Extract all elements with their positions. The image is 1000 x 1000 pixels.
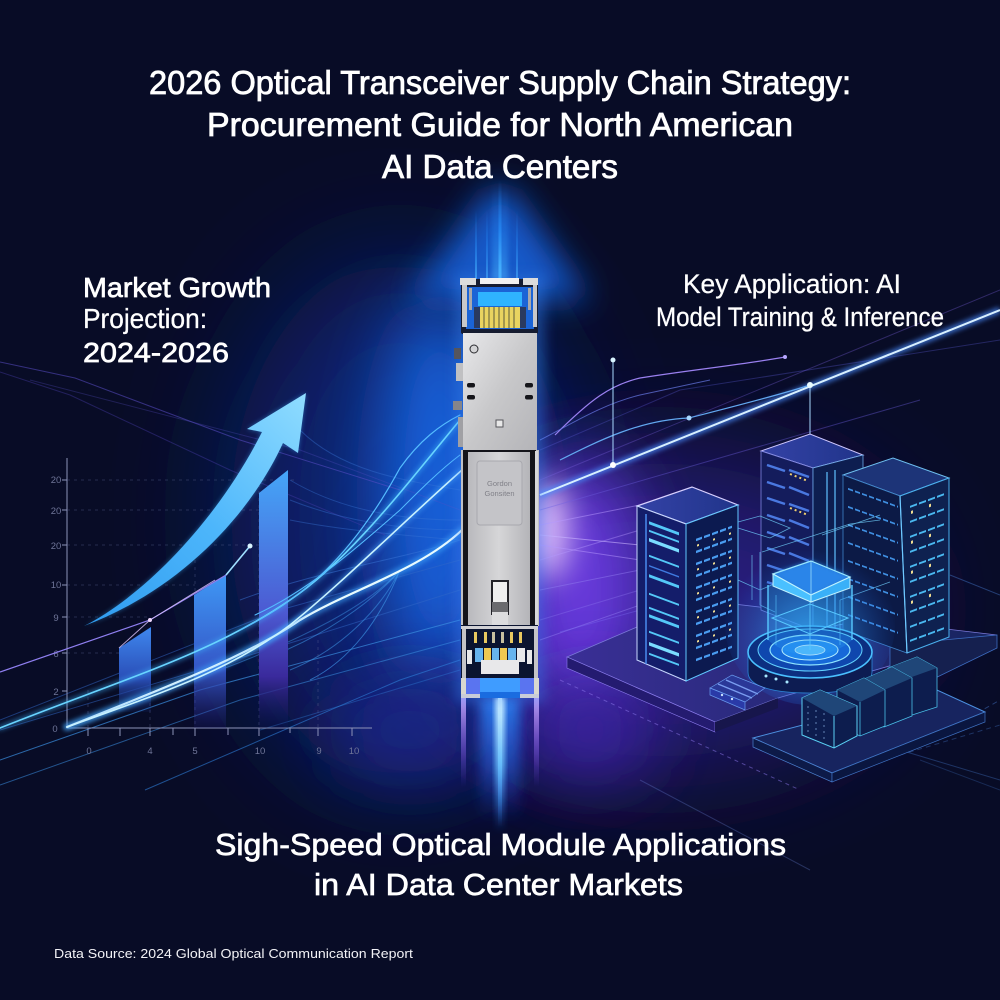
small server: second [837, 678, 885, 736]
chart axis labels: 20 [51, 506, 61, 517]
heading: market growth projection [83, 272, 271, 368]
chart axis labels: 10 [51, 580, 61, 591]
isometric data center [567, 434, 997, 782]
subheading: applications: in AI Data Center Markets [314, 867, 683, 902]
gold contacts [474, 307, 526, 328]
bottom connector [461, 625, 539, 698]
growth arrow [84, 393, 306, 626]
label plate [477, 461, 522, 525]
left side clips [453, 348, 463, 447]
top cage [460, 278, 538, 334]
chart axis labels: 10 [255, 746, 265, 757]
connection wires [738, 515, 890, 612]
heading: market growth projection: Market Growth [83, 272, 271, 303]
chart axis labels: 4 [147, 746, 153, 757]
core disc [748, 626, 872, 693]
small server: front [802, 690, 857, 748]
chart axis labels: 20 [51, 541, 61, 552]
chart axis labels: 9 [53, 613, 59, 624]
chart axis labels: 5 [192, 746, 198, 757]
left flowing light lines [0, 415, 462, 728]
chart axis labels: 0 [52, 724, 58, 735]
heading: key application [656, 269, 944, 332]
module glow [455, 275, 545, 703]
bar 2025 [194, 575, 226, 728]
chart axis labels: 2 [53, 687, 59, 698]
upper silver body [463, 333, 537, 450]
server rack: left [637, 487, 738, 681]
heading: key application: Key Application: AI [683, 269, 901, 299]
subheading: applications [215, 827, 786, 902]
right flowing light lines and nodes [540, 310, 1000, 495]
lower silver body [461, 450, 539, 634]
growth trend line [0, 544, 252, 672]
small switch unit [710, 675, 765, 710]
server rack: right [843, 458, 949, 653]
hologram cylinder [768, 585, 852, 655]
title: 2026 Optical Transceiver Supply Chain Strategy: [149, 64, 851, 101]
heading: key application: Model Training & Inference [656, 302, 944, 332]
chart axis labels: 10 [349, 746, 359, 757]
small server: back [888, 657, 937, 716]
chart axis labels: 9 [316, 746, 322, 757]
light beam above module [475, 180, 518, 280]
label plate: Gordon [487, 479, 512, 488]
server rack: back [761, 434, 863, 640]
chart axis labels: 6 [53, 649, 59, 660]
faint background lines [0, 290, 1000, 870]
subheading: applications: Sigh-Speed Optical Module Applications [215, 827, 786, 862]
AI core hologram [725, 545, 895, 705]
chart axis labels: 0 [86, 746, 92, 757]
platform: rack base [567, 600, 997, 732]
data source note: Data Source: 2024 Global Optical Communication Report [54, 946, 413, 961]
title: Procurement Guide for North American [207, 106, 793, 143]
title [149, 64, 851, 185]
growth chart [0, 393, 372, 757]
latch [491, 580, 509, 634]
floating chip [773, 561, 850, 602]
small server: third [862, 667, 912, 727]
chart gridlines [67, 470, 318, 728]
bar 2026 [259, 470, 288, 728]
chart axis labels [51, 475, 359, 757]
bar 2024 [119, 627, 151, 712]
heading: market growth projection: 2024-2026 [83, 337, 229, 368]
light beam below module [461, 697, 539, 832]
optical transceiver module [453, 275, 545, 703]
title: AI Data Centers [382, 148, 618, 185]
platform: small server base [753, 690, 985, 782]
label plate: Gonsiten [484, 489, 515, 498]
chart axes [62, 458, 372, 736]
chart axis labels: 20 [51, 475, 61, 486]
heading: market growth projection: Projection: [83, 303, 207, 334]
